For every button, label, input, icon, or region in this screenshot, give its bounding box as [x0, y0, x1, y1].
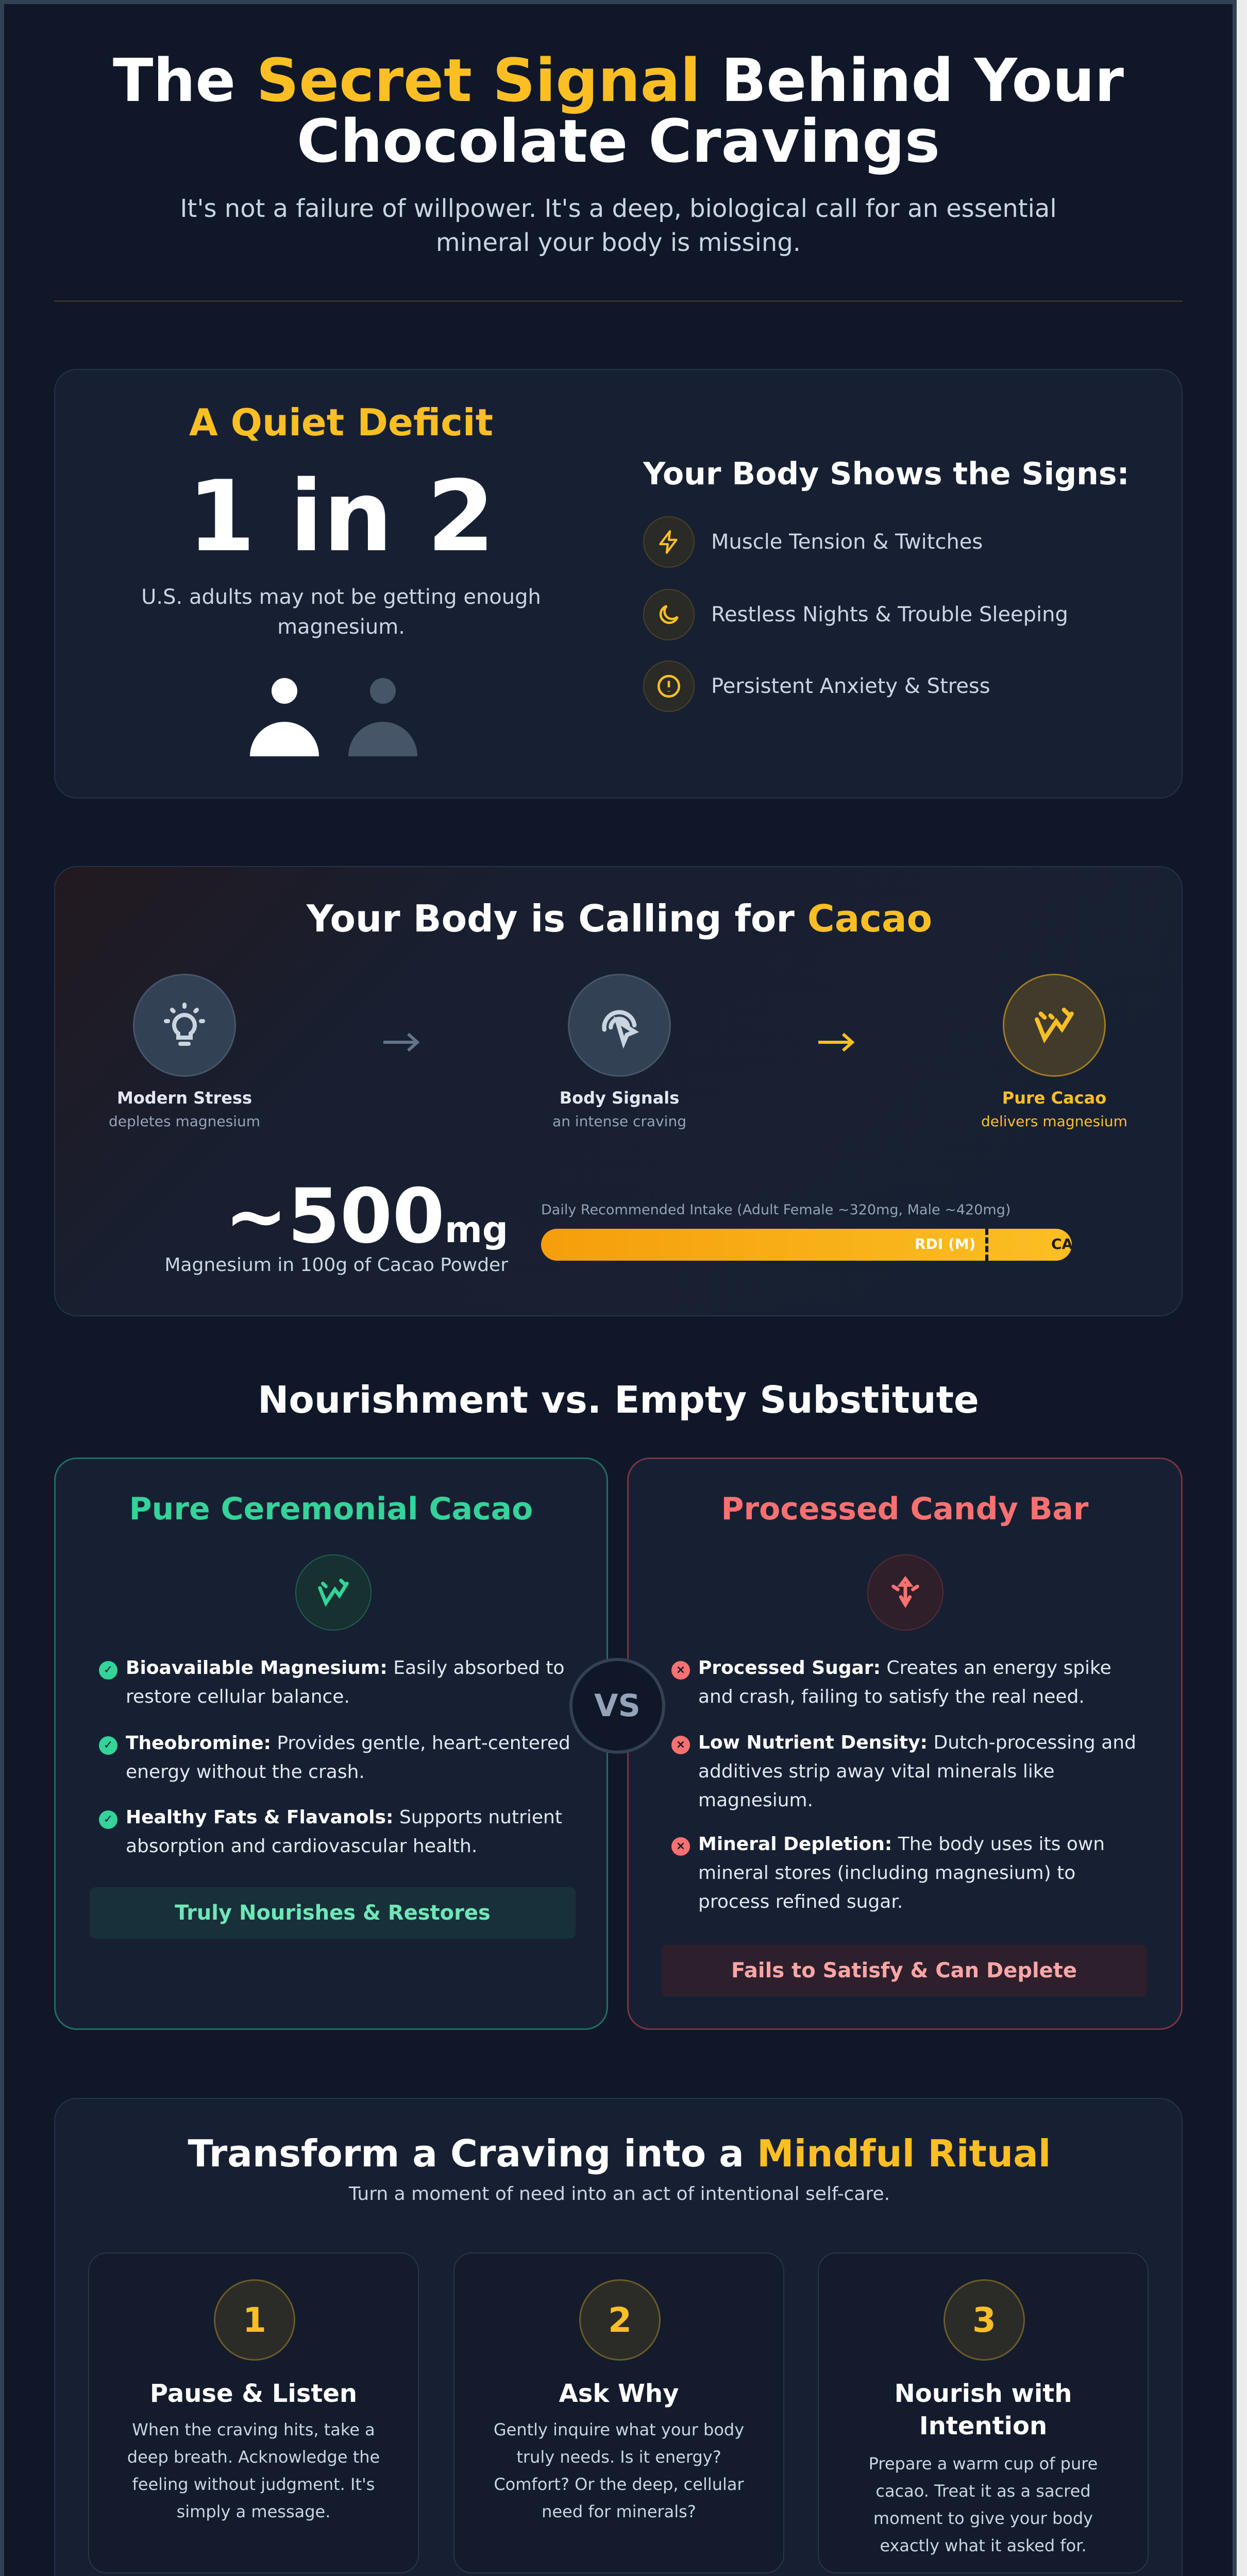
- card text: When the craving hits, take a: [132, 2420, 375, 2439]
- bullet 3: Healthy Fats & Flavanols: Supports nutrient: [126, 1807, 562, 1828]
- subtitle: It's not a failure of willpower. It's a deep, biological call for an essential: [180, 194, 1057, 223]
- card text: Comfort? Or the deep, cellular: [494, 2475, 744, 2494]
- text: stat description: magnesium.: [277, 615, 405, 639]
- sign: anxiety: Persistent Anxiety & Stress: [711, 674, 990, 698]
- icon: candy: [867, 1554, 943, 1631]
- sign: restless nights: Restless Nights & Trouble Sleeping: [711, 603, 1068, 626]
- panel: mindful ritual: [54, 2098, 1183, 2576]
- card title: Pure Ceremonial Cacao: [129, 1491, 533, 1527]
- heading: a quiet deficit: A Quiet Deficit: [189, 401, 493, 444]
- card title: Pause & Listen: [150, 2379, 357, 2408]
- card title: [895, 2379, 1072, 2441]
- bar chart: RDI: [541, 1202, 1072, 1261]
- bullet 2: magnesium.: [698, 1790, 813, 1811]
- text: stat description: U.S. adults may not be getting enough: [141, 585, 541, 609]
- sign: muscle tension: [643, 516, 983, 568]
- bullet 2: Low Nutrient Density: Dutch-processing and: [698, 1732, 1136, 1753]
- bullet 3: Mineral Depletion: The body uses its own: [698, 1834, 1105, 1855]
- sign: anxiety: [643, 660, 990, 712]
- icon: VS: [569, 1658, 665, 1754]
- step: modern stress: depletes magnesium: [109, 1113, 260, 1130]
- bullet 2: energy without the crash.: [126, 1761, 365, 1783]
- card text: Prepare a warm cup of pure: [869, 2454, 1098, 2473]
- bullet 3: process refined sugar.: [698, 1891, 903, 1912]
- number 1: 1: [243, 2300, 266, 2340]
- bullet 3: mineral stores (including magnesium) to: [698, 1862, 1075, 1884]
- text: stat description: [141, 585, 541, 639]
- panel: pure cacao card: ✓: [104, 1739, 113, 1752]
- card text: Gently inquire what your body: [494, 2420, 744, 2439]
- card: step 2: [453, 2252, 784, 2573]
- bullet 2: [99, 1733, 570, 1783]
- number 2: [579, 2279, 661, 2361]
- heading: nourishment vs substitute: Nourishment vs. Empty Substitute: [258, 1378, 979, 1421]
- title: Chocolate Cravings: [297, 107, 940, 176]
- card text: [494, 2420, 744, 2521]
- bullet 2: Theobromine: Provides gentle, heart-centered: [126, 1733, 570, 1754]
- subtitle: [180, 194, 1057, 257]
- subtitle: mineral your body is missing.: [436, 228, 801, 257]
- number 3: [943, 2279, 1025, 2361]
- title: The Secret Signal Behind Your: [113, 46, 1124, 115]
- card text: simply a message.: [177, 2502, 330, 2521]
- bullet 3: [671, 1834, 1105, 1912]
- card text: moment to give your body: [873, 2509, 1093, 2528]
- panel: candy bar card: ×: [676, 1664, 685, 1676]
- panel: quiet deficit: [54, 369, 1183, 799]
- stat: 500mg: ~500mg: [225, 1173, 508, 1260]
- number 3: 3: [972, 2300, 996, 2340]
- panel: candy bar card: [627, 1458, 1183, 2030]
- step: modern stress: Modern Stress: [117, 1088, 252, 1108]
- icon: VS: VS: [594, 1688, 641, 1724]
- icon: cacao: [295, 1554, 372, 1631]
- text: stat caption: Magnesium in 100g of Cacao Powder: [164, 1255, 508, 1276]
- badge: fails: Fails to Satisfy & Can Deplete: [731, 1959, 1077, 1982]
- badge: fails: [661, 1945, 1147, 1996]
- card title: Ask Why: [559, 2379, 679, 2408]
- sign: restless nights: [643, 589, 1068, 640]
- step: body signals: an intense craving: [552, 1113, 686, 1130]
- step: pure cacao: Pure Cacao: [1002, 1088, 1106, 1108]
- number 2: 2: [608, 2300, 632, 2340]
- title: [113, 46, 1124, 176]
- step: body signals: [552, 974, 686, 1130]
- step: body signals: Body Signals: [560, 1088, 679, 1108]
- bullet 3: absorption and cardiovascular health.: [126, 1836, 477, 1857]
- bullet 1: Bioavailable Magnesium: Easily absorbed to: [126, 1657, 565, 1679]
- bullets: [99, 1657, 570, 1857]
- card title: Processed Candy Bar: [721, 1491, 1088, 1527]
- card: step 3: [818, 2252, 1149, 2573]
- card title: Intention: [919, 2412, 1047, 2441]
- bullet 1: [671, 1657, 1111, 1707]
- heading: signs: Your Body Shows the Signs:: [643, 456, 1130, 492]
- subheading: Turn a moment of need into an act of intentional self-care.: [349, 2183, 890, 2205]
- panel: pure cacao card: ✓: [104, 1664, 113, 1676]
- number 1: [214, 2279, 295, 2361]
- card text: exactly what it asked for.: [880, 2536, 1087, 2555]
- stat: 1 in 2: 1 in 2: [187, 460, 495, 573]
- badge: nourishes: Truly Nourishes & Restores: [175, 1901, 491, 1925]
- step: pure cacao: delivers magnesium: [981, 1113, 1127, 1130]
- panel: pure cacao card: [54, 1458, 608, 2030]
- card text: truly needs. Is it energy?: [516, 2447, 721, 2467]
- icon: people: [250, 678, 417, 756]
- panel: candy bar card: ×: [676, 1840, 685, 1853]
- step: pure cacao: [981, 974, 1127, 1130]
- heading: Your Body is Calling for Cacao: [307, 897, 932, 940]
- card text: cacao. Treat it as a sacred: [875, 2481, 1091, 2501]
- bullet 1: Processed Sugar: Creates an energy spike: [698, 1657, 1111, 1679]
- bullets: [671, 1657, 1136, 1912]
- heading: Transform a Craving into a Mindful Ritual: [188, 2132, 1051, 2175]
- bullet 1: [99, 1657, 565, 1707]
- bar chart: RDI: RDI (M): [915, 1235, 975, 1252]
- card: step 1: [88, 2252, 419, 2573]
- card text: [127, 2420, 380, 2521]
- bullet 1: restore cellular balance.: [126, 1686, 350, 1707]
- bullet 3: [99, 1807, 562, 1857]
- panel: pure cacao card: ✓: [104, 1813, 113, 1826]
- card title: Nourish with: [895, 2379, 1072, 2408]
- arrow 1: [383, 1032, 419, 1052]
- bullet 1: and crash, failing to satisfy the real need.: [698, 1686, 1085, 1707]
- card text: feeling without judgment. It's: [132, 2475, 375, 2494]
- bullet 2: additives strip away vital minerals like: [698, 1761, 1055, 1782]
- arrow 2: [818, 1032, 854, 1052]
- card text: deep breath. Acknowledge the: [127, 2447, 380, 2467]
- badge: nourishes: [90, 1887, 576, 1939]
- sign: muscle tension: Muscle Tension & Twitches: [711, 530, 983, 554]
- bar chart: RDI: Daily Recommended Intake (Adult Female ~320mg, Male ~420mg): [541, 1202, 1010, 1218]
- panel: candy bar card: ×: [676, 1738, 685, 1751]
- panel: calling for cacao: [54, 866, 1183, 1316]
- card text: [869, 2454, 1098, 2555]
- step: modern stress: [109, 974, 260, 1130]
- bullet 2: [671, 1732, 1136, 1811]
- card text: need for minerals?: [542, 2502, 696, 2521]
